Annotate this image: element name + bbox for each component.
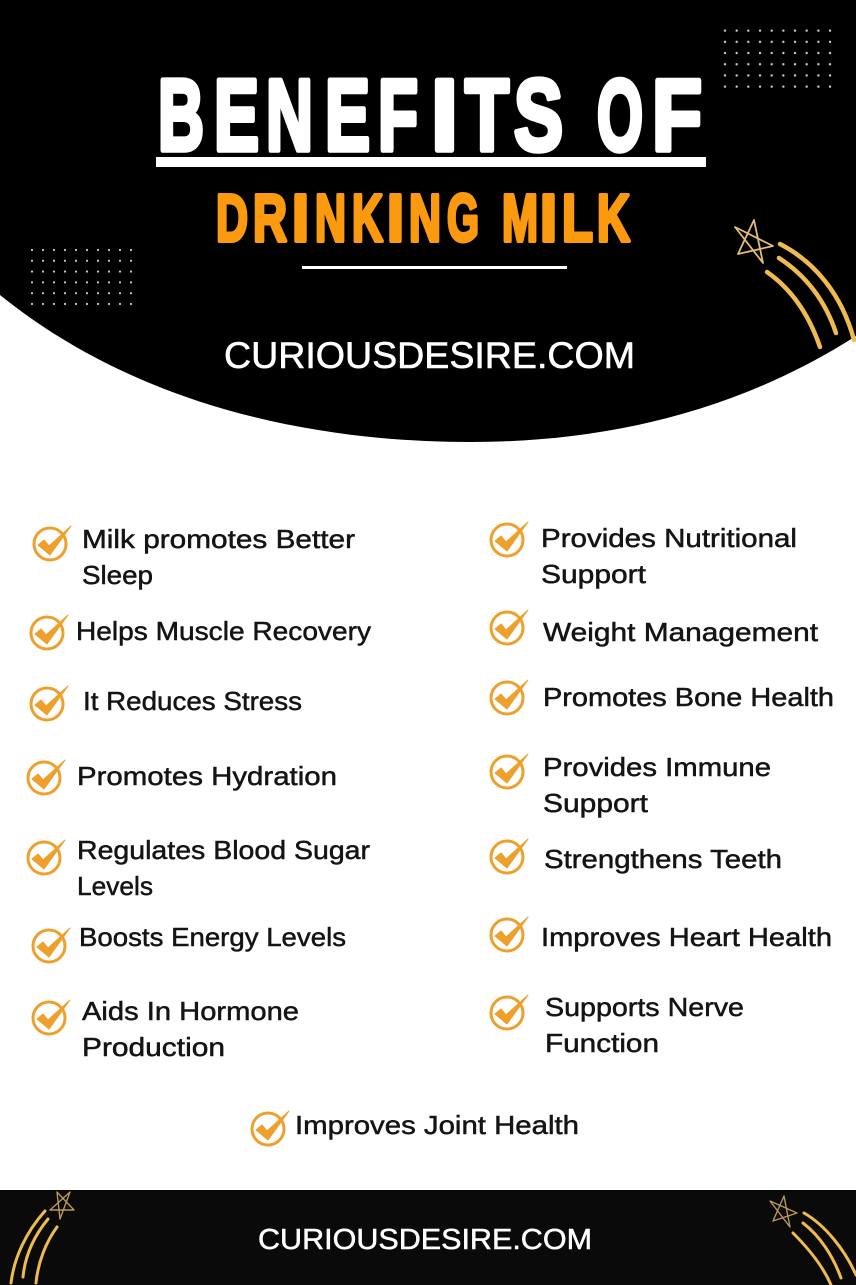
- title: benefits of: O: [597, 60, 643, 172]
- subtitle: drinking milk: K: [352, 181, 383, 256]
- title: benefits of: F: [378, 60, 418, 172]
- subtitle: drinking milk: G: [447, 181, 479, 256]
- title: benefits of: B: [158, 60, 204, 172]
- item: energy: Boosts Energy Levels: [79, 922, 346, 952]
- footer bar: [0, 1190, 856, 1285]
- item: heart health: [491, 917, 832, 952]
- dot grid left: [30, 248, 133, 306]
- item: better sleep: Milk promotes Better: [82, 524, 355, 554]
- item: reduces stress: [31, 686, 302, 720]
- subtitle: drinking milk: D: [216, 181, 248, 256]
- item: blood sugar: Regulates Blood Sugar: [77, 835, 370, 865]
- item: heart health: Improves Heart Health: [541, 922, 832, 952]
- item: nutritional support: Support: [541, 559, 647, 589]
- item: hydration: Promotes Hydration: [77, 761, 337, 791]
- subtitle: drinking milk: I: [292, 181, 309, 256]
- item: energy: [33, 922, 346, 962]
- item: immune support: [491, 752, 771, 818]
- item: muscle recovery: Helps Muscle Recovery: [76, 616, 371, 646]
- subtitle: drinking milk: R: [253, 181, 287, 256]
- website label footer: CURIOUSDESIRE.COM: [258, 1224, 592, 1256]
- item: weight management: Weight Management: [543, 617, 819, 647]
- right column benefits: [491, 522, 834, 1058]
- title: benefits of: N: [266, 60, 313, 172]
- subtitle: drinking milk: L: [562, 181, 593, 256]
- item: teeth: Strengthens Teeth: [544, 844, 782, 874]
- subtitle: drinking milk: K: [597, 181, 630, 256]
- icon: shooting star footer right: [770, 1196, 856, 1285]
- title: benefits of: I: [431, 60, 458, 172]
- subtitle: drinking milk: N: [409, 181, 441, 256]
- item: nerve function: [491, 992, 744, 1058]
- dot grid top right: [723, 29, 833, 89]
- subtitle underline: [302, 266, 567, 269]
- item: nerve function: Supports Nerve: [545, 992, 744, 1022]
- item: nutritional support: [491, 522, 797, 589]
- item: hormone: Production: [82, 1032, 225, 1062]
- item: nerve function: Function: [545, 1028, 659, 1058]
- item: reduces stress: It Reduces Stress: [83, 686, 302, 716]
- item: hormone: [33, 996, 299, 1062]
- left column benefits: [28, 524, 371, 1062]
- title: benefits of: E: [214, 60, 259, 172]
- item: teeth: [491, 839, 782, 874]
- subtitle: drinking milk: N: [315, 181, 346, 256]
- item: immune support: Support: [543, 788, 649, 818]
- title: benefits of: S: [514, 60, 563, 172]
- item: hydration: [28, 760, 337, 794]
- item: joint health: Improves Joint Health: [295, 1110, 579, 1140]
- title: benefits of: T: [465, 60, 509, 172]
- title: benefits of: E: [325, 60, 370, 172]
- item: hormone: Aids In Hormone: [82, 996, 299, 1026]
- item: better sleep: Sleep: [82, 560, 153, 590]
- item: blood sugar: Levels: [77, 871, 153, 901]
- item: joint health: [252, 1110, 579, 1145]
- subtitle: drinking milk: [216, 181, 630, 256]
- header black curved panel: [0, 0, 856, 442]
- item: immune support: Provides Immune: [543, 752, 771, 782]
- item: nutritional support: Provides Nutritional: [541, 523, 797, 553]
- title: benefits of: F: [652, 60, 702, 172]
- item: blood sugar: [28, 835, 370, 901]
- title underline: [156, 157, 706, 167]
- item: weight management: [491, 610, 819, 647]
- icon: shooting star top right: [735, 220, 854, 347]
- item: bone health: Promotes Bone Health: [543, 682, 834, 712]
- subtitle: drinking milk: I: [540, 181, 557, 256]
- icon: shooting star footer left: [11, 1192, 74, 1283]
- item: better sleep: [34, 524, 355, 590]
- item: bone health: [491, 680, 834, 714]
- subtitle: drinking milk: I: [387, 181, 404, 256]
- title: benefits of: [158, 60, 702, 172]
- subtitle: drinking milk: M: [502, 181, 538, 256]
- website label top: CURIOUSDESIRE.COM: [224, 335, 635, 376]
